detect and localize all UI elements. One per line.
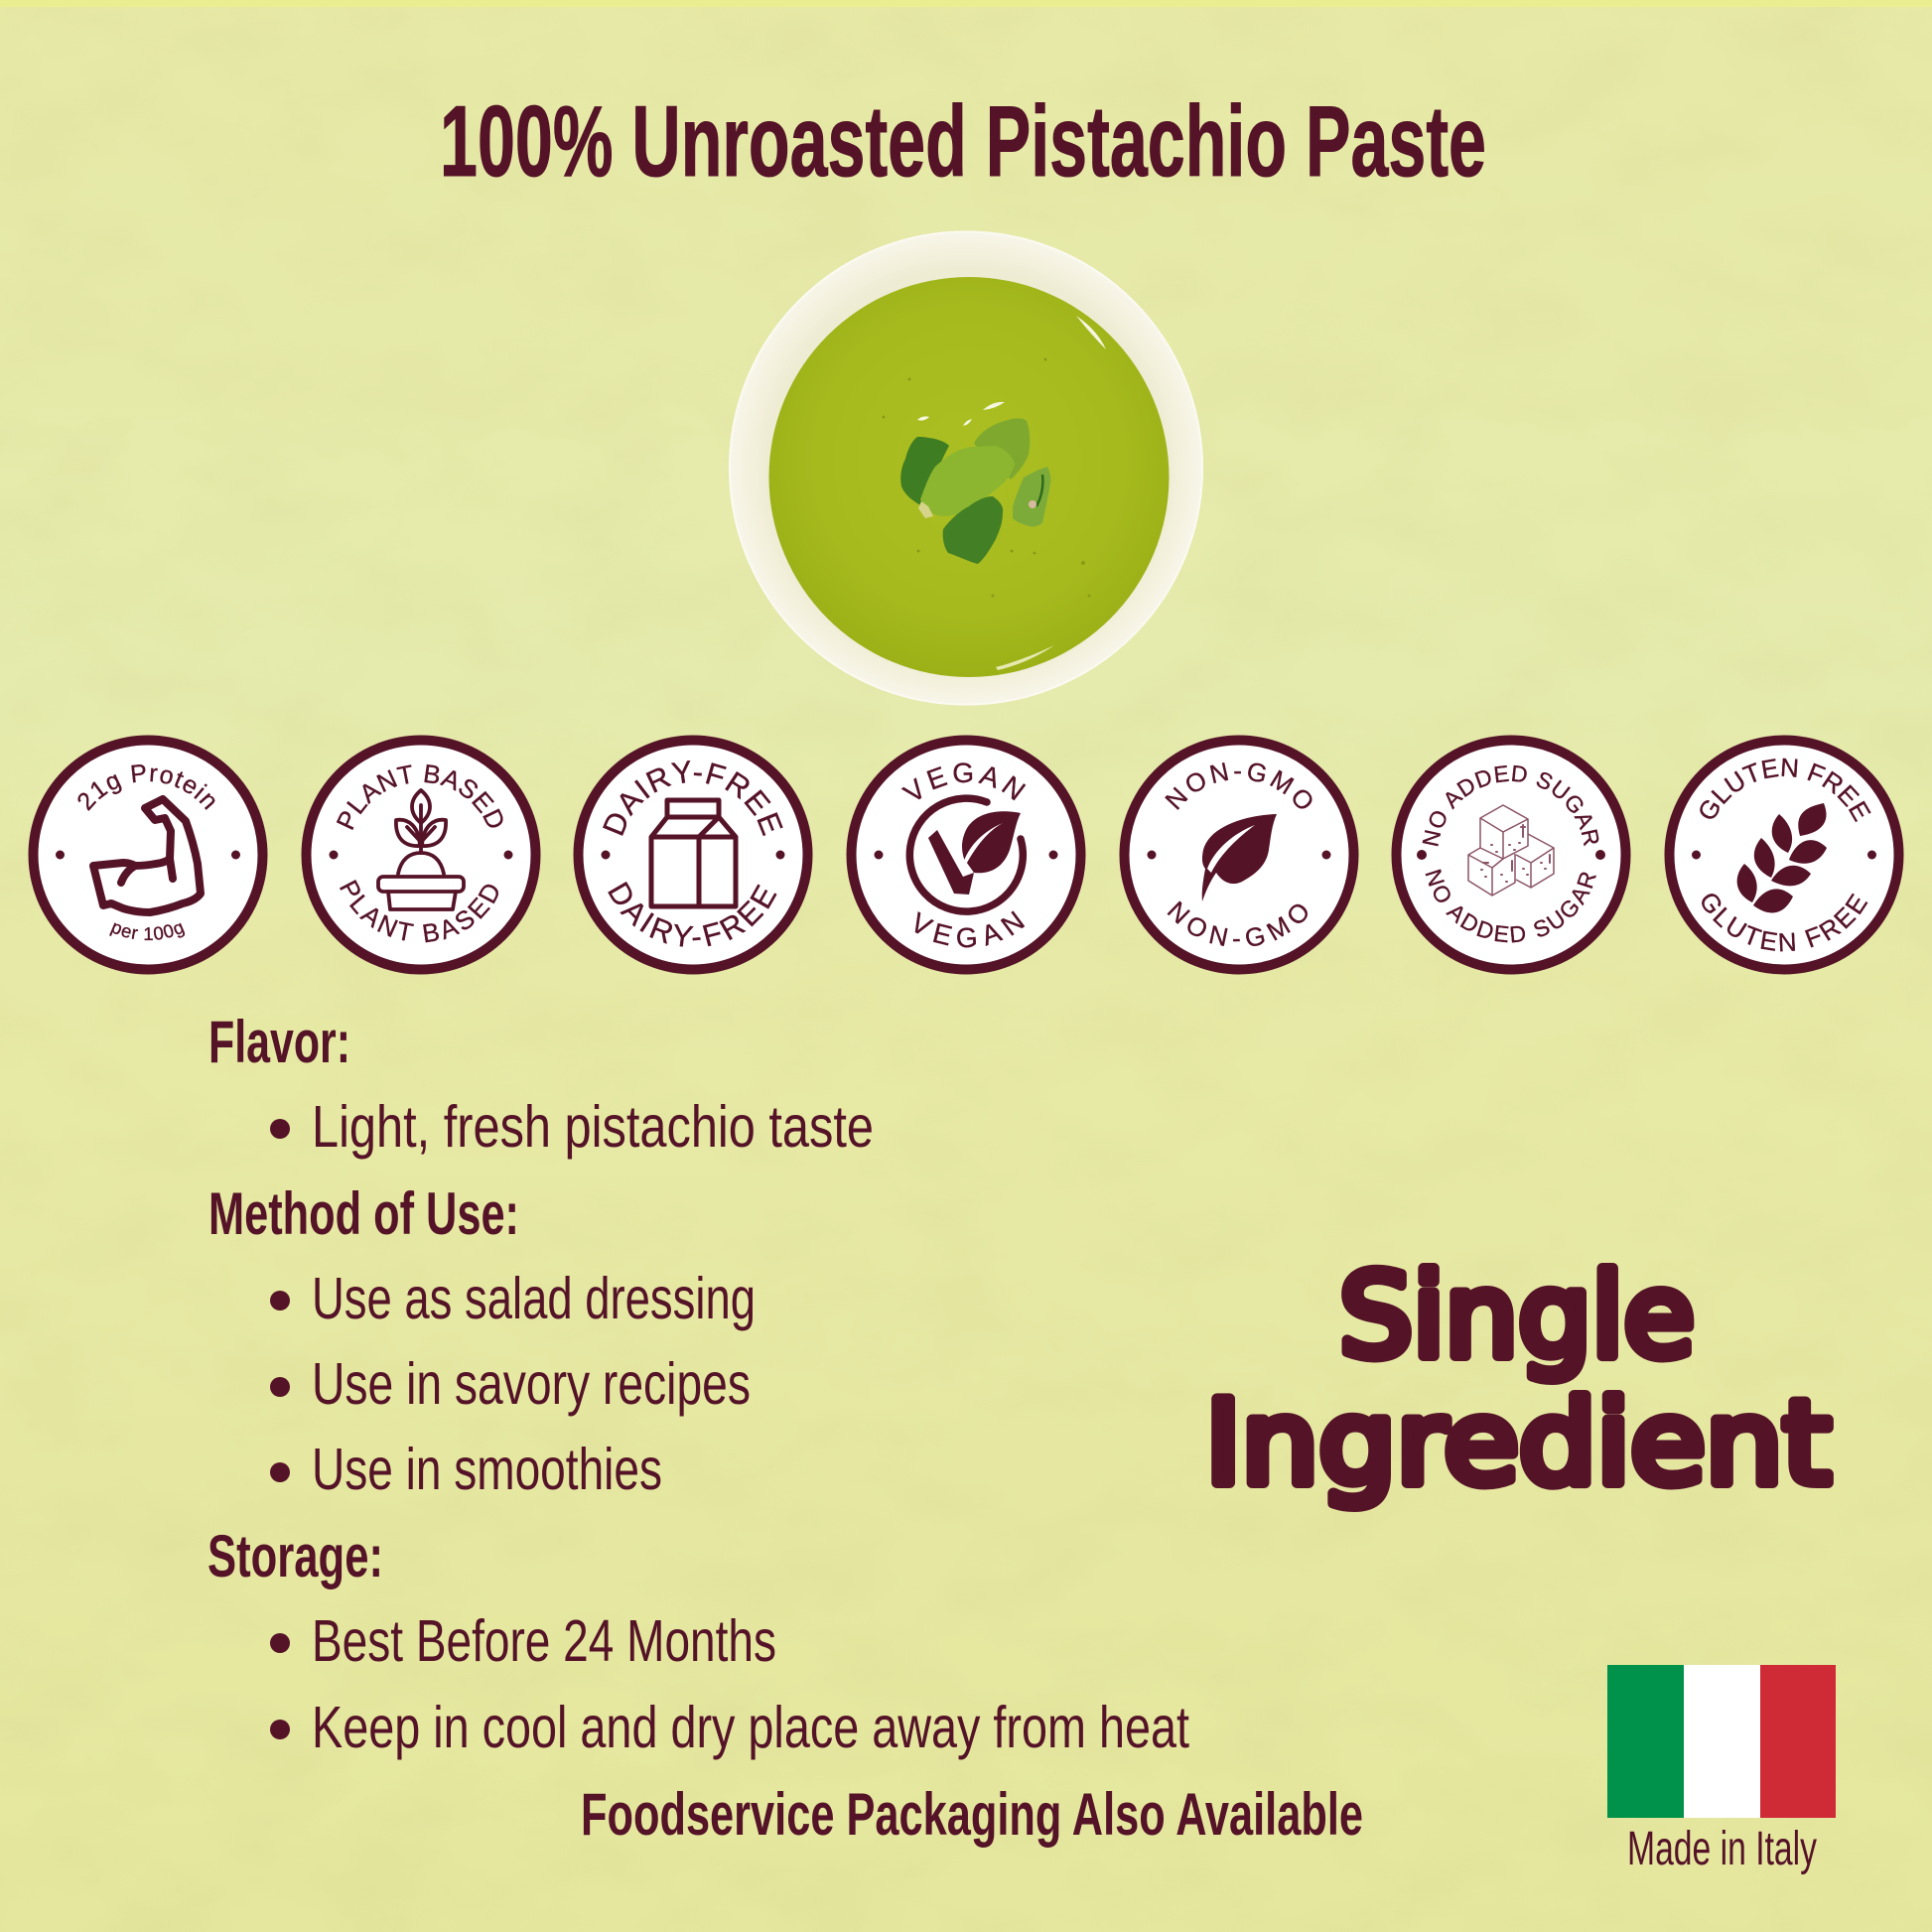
heading: Method of Use: Method of Use: (208, 1180, 519, 1247)
badge label: bottom: NON-GMO (1168, 900, 1308, 946)
callout: Single Ingredient: Ingredient (1205, 1376, 1831, 1511)
pistachio pieces (900, 418, 1050, 564)
text block: product details (207, 1009, 1189, 1760)
badge: Dairy-Free (574, 735, 812, 975)
badge: Vegan (846, 735, 1086, 975)
badge: 21g Protein (28, 735, 268, 975)
bullet: Use in savory recipes: Use in savory recipes (312, 1351, 751, 1417)
icon: flexed arm (93, 799, 201, 912)
badge label: bottom: GLUTEN FREE (1702, 894, 1868, 951)
badge label: top: DAIRY-FREE (603, 760, 783, 836)
badge label: top: NO ADDED SUGAR (1422, 764, 1598, 846)
bullet: Keep in cool and dry place away from heat: Keep in cool and dry place away from heat (312, 1695, 1189, 1760)
caption: Made in Italy: Made in Italy (1627, 1823, 1817, 1875)
bullet: Light, fresh pistachio taste: Light, fresh pistachio taste (312, 1094, 874, 1160)
badge label: 21g Protein: 21g Protein (77, 764, 214, 811)
icon: sugar cubes (1468, 805, 1554, 896)
badge: Non-GMO (1120, 735, 1358, 975)
badge: Plant Based (302, 735, 540, 975)
badge label: bottom: VEGAN (915, 910, 1025, 947)
icon: potted plant (378, 790, 464, 909)
bullet: Best Before 24 Months: Best Before 24 Months (312, 1608, 776, 1674)
badge label: bottom: DAIRY-FREE (608, 882, 776, 947)
icon: wheat (1737, 803, 1827, 912)
badge label: top: PLANT BASED (336, 764, 503, 830)
badge label: per 100g: per 100g (109, 922, 185, 941)
bullet: Use in smoothies: Use in smoothies (312, 1437, 662, 1502)
heading: Storage: Storage: (207, 1523, 383, 1589)
heading: Flavor: Flavor: (208, 1009, 350, 1075)
badge label: top: GLUTEN FREE (1700, 759, 1870, 822)
badge: Gluten Free (1664, 735, 1904, 975)
icon: milk carton (651, 800, 736, 906)
bullet: Use as salad dressing: Use as salad dressing (312, 1266, 756, 1331)
callout: Single Ingredient (1205, 1249, 1831, 1511)
badge label: bottom: PLANT BASED (340, 880, 498, 943)
callout: Single Ingredient: Single (1339, 1249, 1695, 1384)
badge label: bottom: NO ADDED SUGAR (1426, 869, 1596, 943)
badge label: top: NON-GMO (1165, 762, 1312, 810)
icon: leaf (1202, 814, 1277, 901)
icon: vegan check leaf (909, 798, 1023, 911)
flag of Italy (1607, 1665, 1836, 1818)
badge: No Added Sugar (1392, 735, 1630, 975)
bowl of pistachio paste (729, 230, 1203, 705)
foodservice note: Foodservice Packaging Also Available (581, 1781, 1363, 1848)
badge label: top: VEGAN (901, 762, 1027, 800)
